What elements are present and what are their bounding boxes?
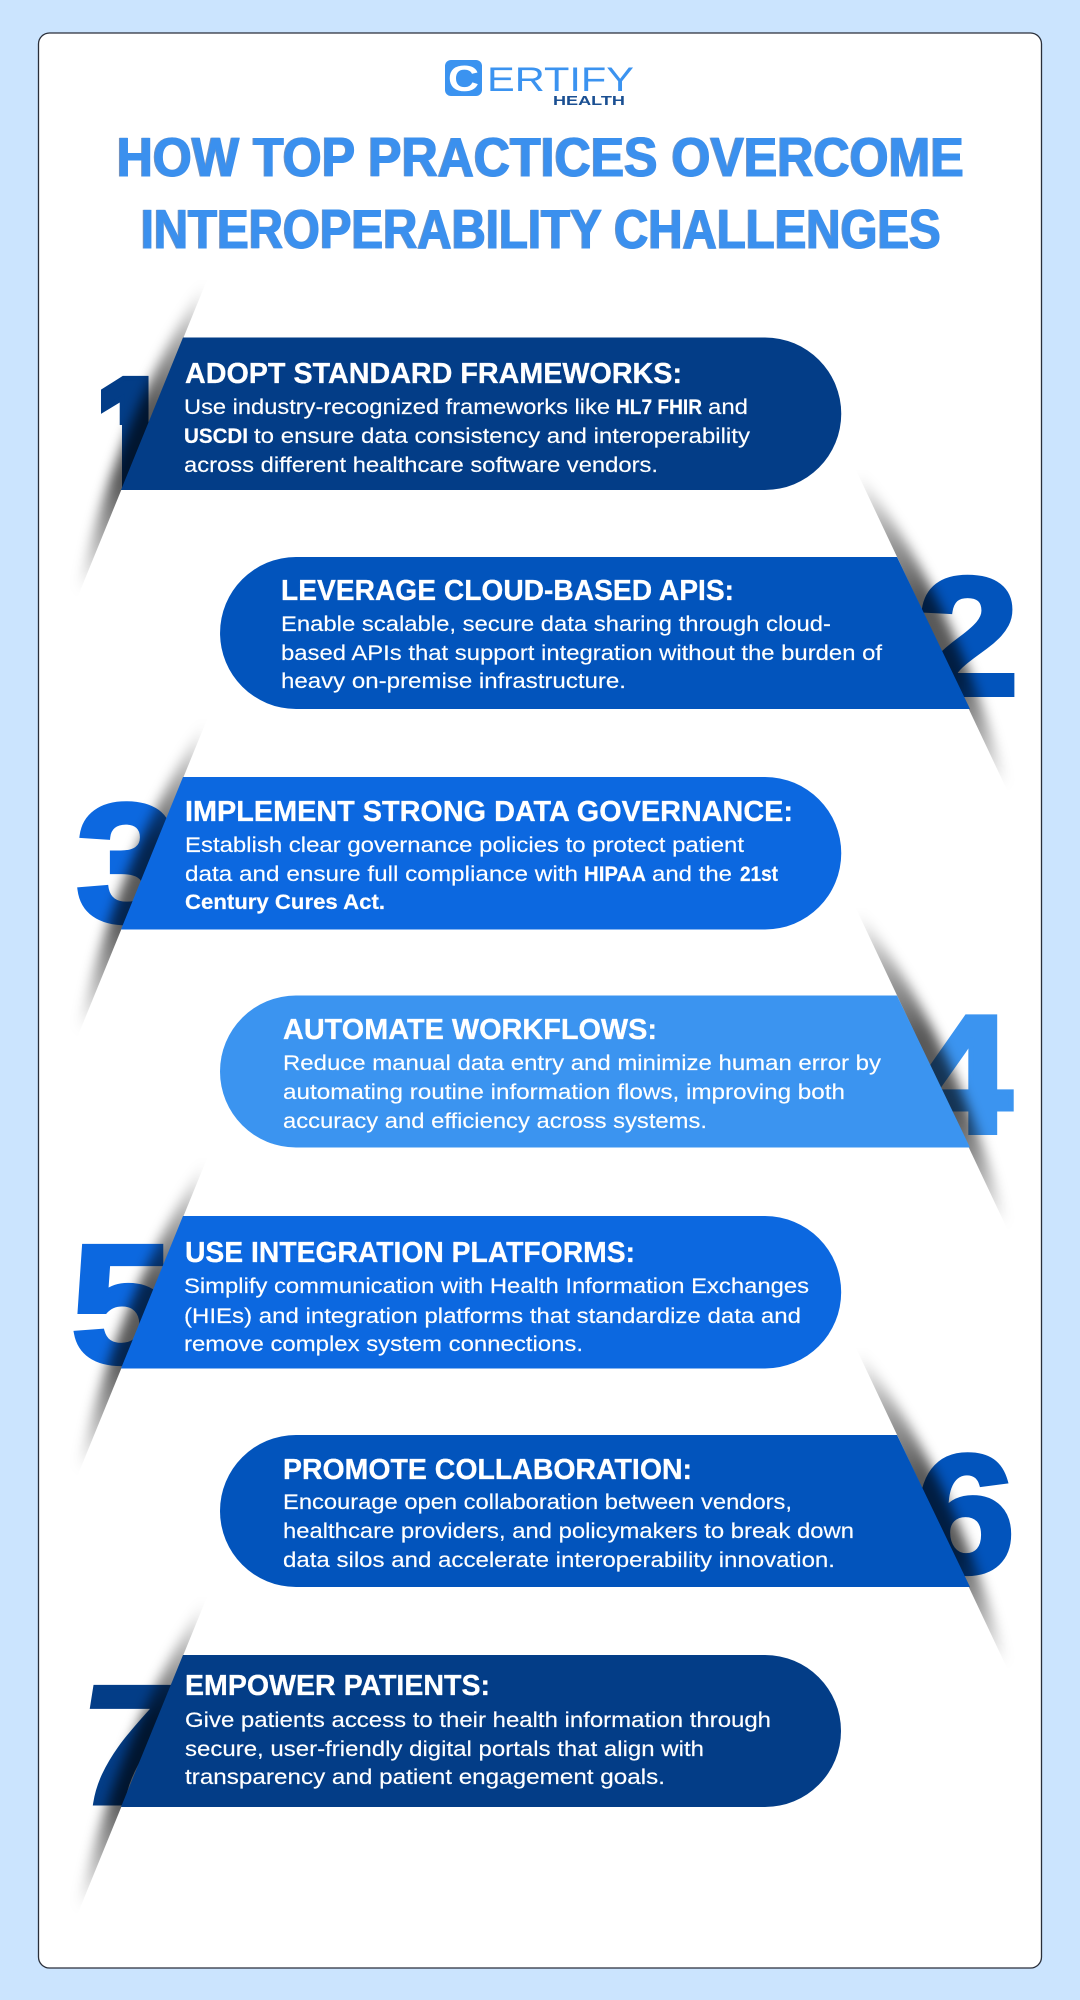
number 6: 6 [915,1420,1015,1608]
body 6: data silos and accelerate interoperability innovation. [283,1549,835,1572]
body 3: 21st [740,862,778,886]
body 5: Simplify communication with Health Information Exchanges [184,1275,809,1298]
body 4: Reduce manual data entry and minimize human error by [283,1052,882,1075]
pill 3 [121,777,841,930]
heading 3: IMPLEMENT STRONG DATA GOVERNANCE: [185,796,793,828]
body 5: remove complex system connections. [184,1333,583,1356]
number 2: 2 [917,542,1019,730]
body 7: secure, user-friendly digital portals that align with [185,1738,704,1761]
body 6 [283,1491,854,1572]
body 3: Century Cures Act. [185,890,385,914]
step 7: empower patients [64,1597,841,1913]
heading 6: PROMOTE COLLABORATION: [283,1454,692,1486]
body 4: accuracy and efficiency across systems. [283,1110,707,1133]
body 1: and [708,396,748,419]
body 2: heavy on-premise infrastructure. [281,670,626,693]
logo subline: HEALTH [553,93,625,108]
number 4: 4 [912,980,1012,1168]
body 6: Encourage open collaboration between vendors, [283,1491,792,1514]
body 3: data and ensure full compliance with [185,863,578,886]
pill 7 [121,1655,841,1807]
heading 1: ADOPT STANDARD FRAMEWORKS: [185,358,682,390]
heading 5: USE INTEGRATION PLATFORMS: [185,1237,635,1269]
logo wordmark: ERTIFY [487,61,634,99]
number 3: 3 [76,769,178,957]
body 5: (HIEs) and integration platforms that standardize data and [184,1305,801,1328]
body 7: transparency and patient engagement goals. [185,1766,665,1789]
pill 1 [121,338,841,490]
body 2: Enable scalable, secure data sharing through cloud- [281,613,831,636]
body 1: HL7 FHIR [616,395,702,419]
body 2: based APIs that support integration without the burden of [281,642,882,665]
body 3: HIPAA [584,862,646,886]
title: HOW TOP PRACTICES OVERCOME [117,126,964,188]
step 1: adopt standard frameworks [78,280,841,596]
body 1: Use industry-recognized frameworks like [184,396,610,419]
body 2 [281,613,882,693]
title [117,126,964,260]
step 3: implement strong data governance [76,720,841,1036]
step 6: promote collaboration [220,1348,1015,1668]
body 4: automating routine information flows, improving both [283,1081,845,1104]
number 1: 1 [82,342,178,530]
heading 4: AUTOMATE WORKFLOWS: [283,1014,657,1046]
pill 2 [220,557,970,709]
body 1: USCDI [184,424,248,448]
body 7: Give patients access to their health information through [185,1709,771,1732]
number 7: 7 [64,1651,196,1839]
body 3: and the [652,863,732,886]
title: INTEROPERABILITY CHALLENGES [141,198,941,260]
body 3: Establish clear governance policies to protect patient [185,834,744,857]
number 5: 5 [71,1210,173,1398]
pill 5 [121,1216,841,1368]
pill 6 [220,1435,970,1587]
body 3 [185,834,778,914]
body 1: to ensure data consistency and interoperability [254,425,751,448]
body 7 [185,1709,771,1789]
body 4 [283,1052,882,1133]
body 1: across different healthcare software vendors. [184,454,658,477]
body 5 [184,1275,809,1356]
pill 4 [220,996,970,1148]
body 6: healthcare providers, and policymakers to break down [283,1520,854,1543]
step 2: leverage cloud-based apis [220,470,1019,790]
step 4: automate workflows [220,908,1012,1228]
body 1 [184,395,751,477]
heading 2: LEVERAGE CLOUD-BASED APIS: [281,575,734,607]
step 5: use integration platforms [71,1158,841,1474]
logo: Certify Health [445,58,634,108]
icon: logo C badge: C [448,58,479,99]
heading 7: EMPOWER PATIENTS: [185,1670,490,1702]
